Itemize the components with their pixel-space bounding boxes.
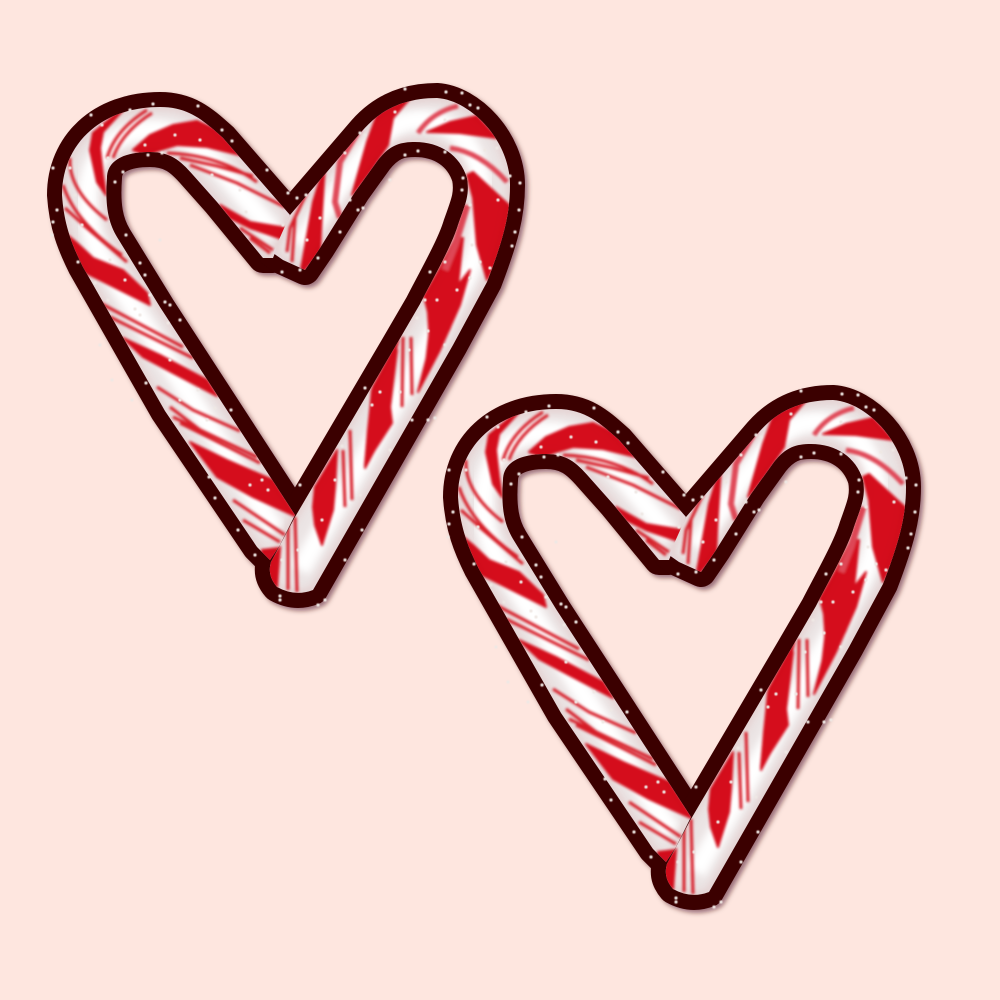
heart: lower right: [436, 391, 916, 907]
dark outline: [62, 98, 510, 593]
right cane: [260, 90, 520, 600]
sparkles: [52, 89, 520, 605]
cane shading: [62, 107, 295, 560]
illustration: two candy cane hearts: [46, 82, 928, 916]
cane shading: [270, 98, 510, 593]
heart: upper left: [40, 89, 520, 605]
left cane: [40, 90, 310, 585]
